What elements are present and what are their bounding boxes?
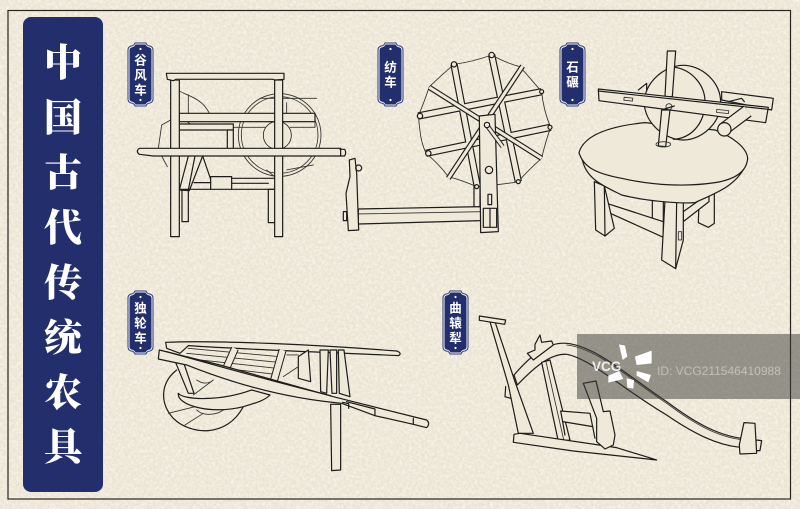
plaque: 石碾 <box>560 43 585 106</box>
title: vertical heading: 代 <box>44 208 83 250</box>
title: vertical heading: 国 <box>44 98 82 140</box>
plaque: 曲辕犁: 犁 <box>449 330 462 346</box>
watermark band <box>577 334 800 399</box>
title: vertical heading: 中 <box>44 43 82 85</box>
plaque: 独轮车: 车 <box>134 330 147 346</box>
table legs <box>594 182 714 269</box>
title: vertical heading <box>42 43 89 469</box>
support stay <box>176 362 194 393</box>
main shaft <box>158 350 429 428</box>
wheel post <box>479 114 503 233</box>
title: vertical heading: 农 <box>42 373 82 415</box>
plaque: 石碾: 碾 <box>566 76 579 90</box>
illustration: curved-beam plough <box>479 316 762 460</box>
cross beam <box>598 89 768 123</box>
plaque: 谷风车: 风 <box>134 68 147 82</box>
left upright <box>340 149 362 231</box>
round table top <box>579 123 748 203</box>
wheel fender <box>178 390 270 410</box>
beam end block <box>739 423 762 454</box>
plaque: 纺车: 纺 <box>384 60 397 74</box>
stone wheel <box>638 65 773 140</box>
wheel bars <box>417 52 552 189</box>
long handle <box>137 148 341 156</box>
curved beam <box>514 343 742 447</box>
share base <box>513 433 657 460</box>
plaque: 曲辕犁 <box>443 291 468 354</box>
title: vertical heading: 统 <box>44 318 85 360</box>
plaque: 谷风车 <box>128 43 153 106</box>
title: vertical heading: 传 <box>44 263 82 305</box>
roller handle <box>718 111 748 136</box>
legs and top beam <box>166 73 284 237</box>
plaque: 纺车: 车 <box>384 74 397 90</box>
wheel rim <box>418 55 551 187</box>
beam clamp <box>527 335 553 360</box>
title panel <box>23 17 103 492</box>
handle <box>479 316 533 433</box>
watermark logo <box>608 344 652 389</box>
plaque: 独轮车: 独 <box>134 300 147 316</box>
mouldboard <box>583 381 615 449</box>
illustration: wheelbarrow <box>158 342 429 471</box>
support leg <box>331 404 341 471</box>
wheel <box>164 370 243 431</box>
base beam <box>358 187 482 224</box>
axle post <box>656 51 676 147</box>
plaque: 纺车 <box>378 43 403 106</box>
illustration: spinning wheel <box>340 52 552 233</box>
hopper and body <box>158 90 315 167</box>
upright and rungs <box>542 360 595 442</box>
plaque: 谷风车: 谷 <box>134 54 147 68</box>
plaque: 独轮车: 轮 <box>134 316 147 330</box>
title: vertical heading: 具 <box>44 427 89 469</box>
plaque: 曲辕犁: 曲 <box>449 302 462 316</box>
watermark VCG text: VCG <box>592 359 621 374</box>
watermark ID text: ID: VCG211546410988 <box>657 364 781 378</box>
plaque: 谷风车: 车 <box>134 82 147 98</box>
illustration: winnowing machine <box>137 73 341 237</box>
fan wheel <box>238 94 321 178</box>
cargo deck <box>166 342 400 397</box>
title: vertical heading: 古 <box>44 153 82 195</box>
illustration: stone roller mill <box>579 51 773 269</box>
lower frame <box>179 156 275 223</box>
plaque: 独轮车 <box>128 291 153 354</box>
plaque: 曲辕犁: 辕 <box>449 316 462 330</box>
plaque: 石碾: 石 <box>566 60 579 74</box>
